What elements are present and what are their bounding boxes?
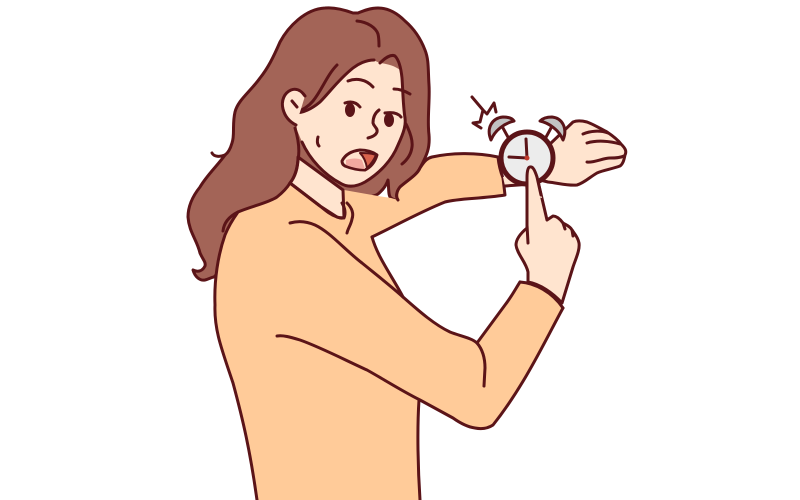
armpit edge — [372, 237, 403, 297]
clock bell: right — [540, 117, 565, 140]
hair strand: lower left — [223, 212, 238, 231]
bell stems — [503, 128, 551, 139]
hairline outline — [295, 60, 374, 113]
raised wrist hand — [503, 121, 626, 186]
ear — [282, 89, 305, 125]
sleeve cuff on raised arm — [372, 157, 505, 237]
collar line — [290, 183, 344, 218]
clock centre — [524, 156, 530, 160]
clock bell: left — [489, 117, 514, 140]
collar folds — [342, 203, 353, 233]
forearm cuff — [520, 282, 563, 308]
pointing arm upper edge — [290, 222, 477, 343]
forearm lower edge — [277, 308, 563, 429]
face-side strand — [295, 65, 337, 113]
open mouth — [342, 150, 377, 170]
fringe outline — [380, 55, 405, 118]
elbow crease — [477, 343, 485, 386]
pointing hand — [516, 167, 579, 303]
hair fringe over face — [380, 56, 400, 70]
fingertip over clock — [527, 167, 542, 198]
hair — [188, 8, 429, 280]
right eye — [384, 113, 401, 127]
forearm upper edge — [477, 282, 520, 343]
clock body — [501, 132, 553, 184]
body left edge and shoulder — [215, 183, 290, 500]
finger lines — [583, 131, 624, 162]
ringing marks — [472, 97, 496, 128]
pointing hand finger crease — [527, 223, 573, 243]
sweater outlines — [215, 154, 563, 500]
sleeve top edge — [397, 154, 498, 200]
neck back line — [290, 128, 299, 183]
face — [295, 60, 405, 187]
neck — [290, 157, 344, 218]
tongue — [346, 158, 365, 169]
eyebrows — [348, 79, 410, 94]
hair strand: centre parting — [357, 21, 379, 46]
clock hands — [509, 139, 527, 158]
fingertip outline — [527, 167, 541, 195]
jaw line — [302, 118, 405, 186]
nose — [368, 110, 379, 138]
sweat drop — [317, 137, 319, 146]
torso and arm: orange sweater — [215, 154, 563, 500]
wrist patch under clock — [503, 170, 532, 186]
ear inner mark — [292, 101, 297, 107]
inner mouth — [360, 153, 376, 168]
left eye — [345, 102, 360, 117]
face outlines — [290, 55, 412, 218]
hair strand: left wisp — [212, 153, 225, 156]
body right edge — [418, 400, 420, 500]
alarm clock — [489, 117, 565, 184]
cheek strand right — [402, 124, 412, 164]
